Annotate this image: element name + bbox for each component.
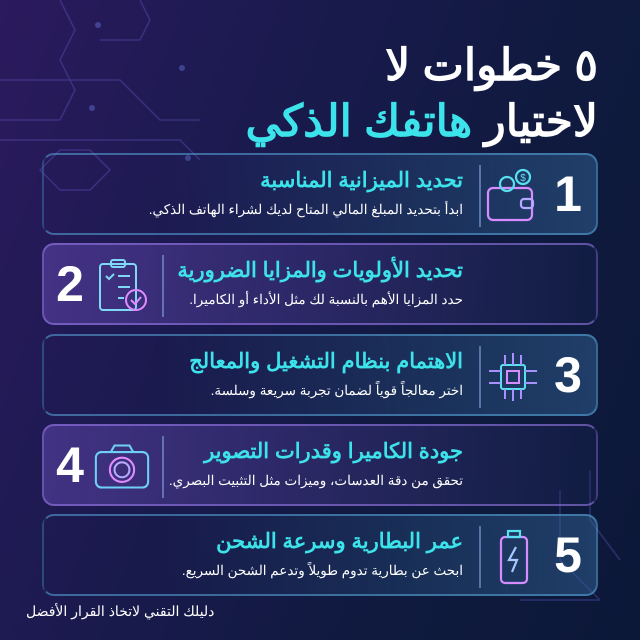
text 3: الاهتمام بنظام التشغيل والمعالج xyxy=(189,350,463,373)
card 4 xyxy=(42,424,598,506)
text 2: تحديد الأولويات والمزايا الضرورية xyxy=(177,259,463,282)
text 1: ابدأ بتحديد المبلغ المالي المتاح لديك لشراء الهاتف الذكي. xyxy=(149,202,463,217)
icon: wallet: $ xyxy=(520,173,526,184)
text 5: ابحث عن بطارية تدوم طويلاً وتدعم الشحن السريع. xyxy=(182,563,463,578)
text 4: تحقق من دقة العدسات، وميزات مثل التثبيت البصري. xyxy=(169,473,463,488)
title xyxy=(245,41,598,148)
text 1: تحديد الميزانية المناسبة xyxy=(260,169,463,192)
icon: battery xyxy=(500,530,528,584)
icon: checklist xyxy=(99,259,147,311)
icon: wallet xyxy=(486,168,534,222)
text 2: حدد المزايا الأهم بالنسبة لك مثل الأداء أو الكاميرا. xyxy=(189,292,463,307)
number 5: 5 xyxy=(554,527,582,583)
card 5 xyxy=(42,514,598,596)
icon: chip xyxy=(489,353,537,401)
card 3 xyxy=(42,334,598,416)
number 1: 1 xyxy=(554,166,582,222)
card 2 xyxy=(42,243,598,325)
number 4: 4 xyxy=(56,437,84,493)
card 1 xyxy=(42,153,598,235)
title: ٥ خطوات لا xyxy=(385,41,598,90)
text 4: جودة الكاميرا وقدرات التصوير xyxy=(204,440,463,463)
text 2 xyxy=(177,256,463,308)
title: لاختيار هاتفك الذكي xyxy=(245,97,598,146)
text 5: عمر البطارية وسرعة الشحن xyxy=(216,530,463,553)
number 3: 3 xyxy=(554,347,582,403)
number 2: 2 xyxy=(56,256,84,312)
footer: دليلك التقني لاتخاذ القرار الأفضل xyxy=(26,603,214,619)
text 3 xyxy=(189,350,463,398)
text 4 xyxy=(169,440,463,488)
text 3: اختر معالجاً قوياً لضمان تجربة سريعة وسلسة. xyxy=(211,383,463,398)
icon: camera xyxy=(94,444,150,488)
text 5 xyxy=(182,530,463,578)
text 1 xyxy=(149,169,463,218)
